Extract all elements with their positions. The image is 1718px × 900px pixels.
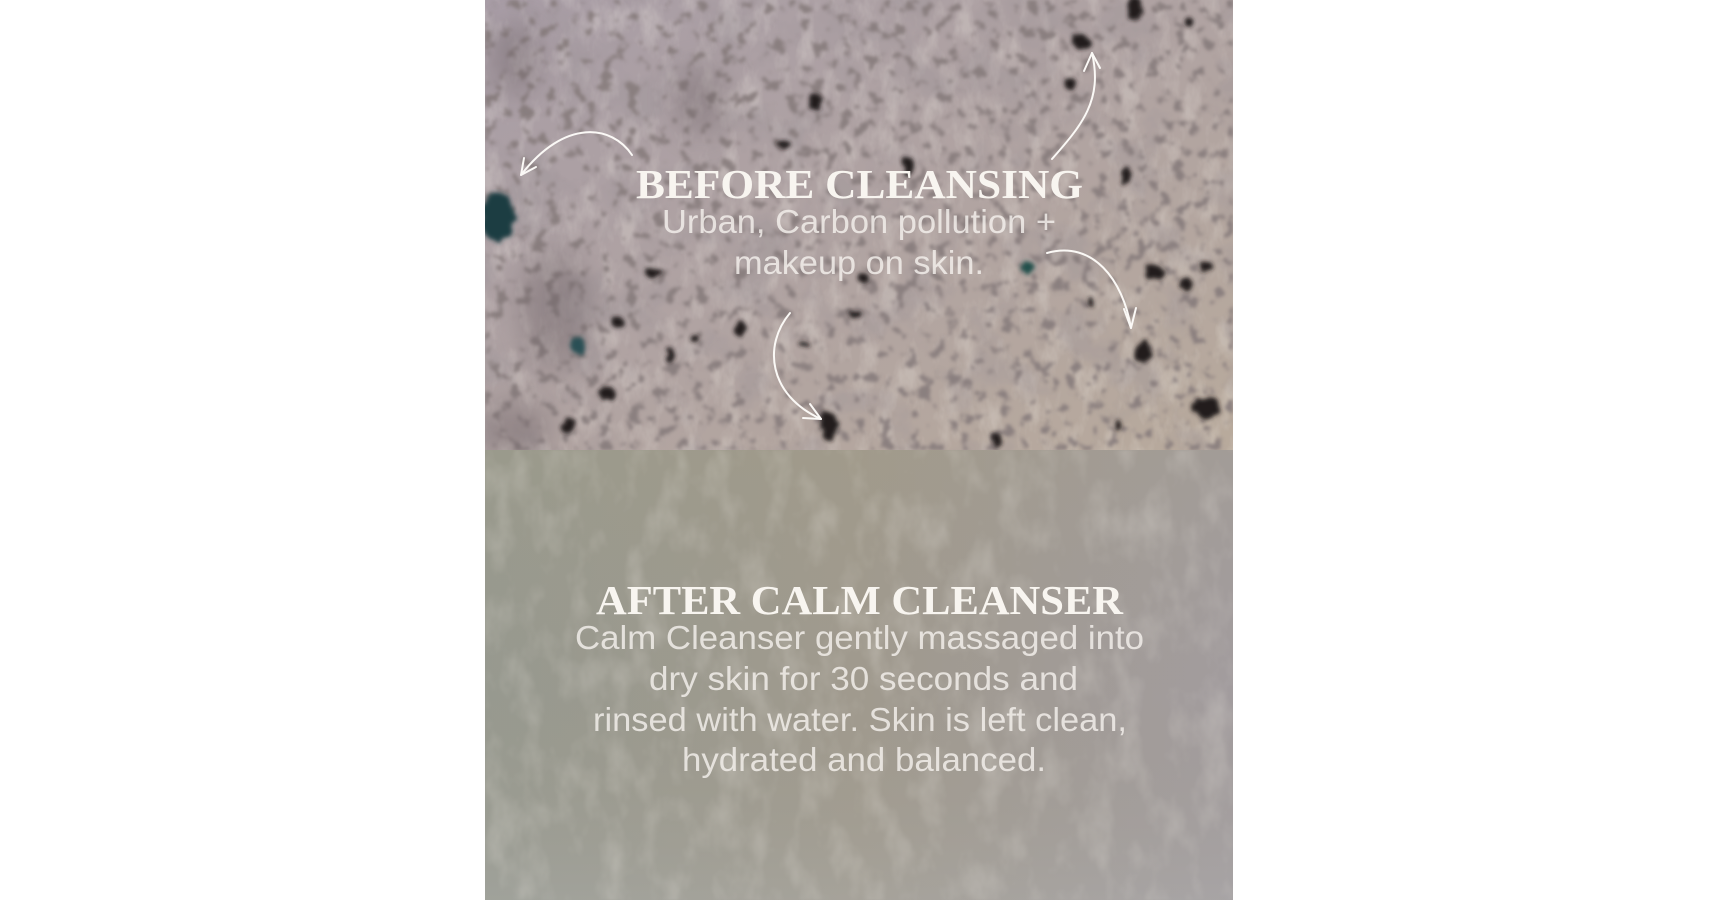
text: before description: Urban, Carbon pollution + xyxy=(662,203,1056,240)
arrow: to upper right speck xyxy=(1052,53,1100,159)
text: after description: hydrated and balanced. xyxy=(682,741,1046,778)
arrow: to lower speck xyxy=(774,313,821,419)
panel: before cleansing xyxy=(480,0,1233,460)
panel: after calm cleanser xyxy=(485,450,1233,900)
text: before description: makeup on skin. xyxy=(734,244,984,281)
arrow: to right speck xyxy=(1047,251,1136,328)
skin photo with pollution specks xyxy=(480,0,1233,460)
text: after description: Calm Cleanser gently massaged into xyxy=(575,619,1144,656)
clean skin photo xyxy=(485,450,1233,900)
infographic: before and after cleansing xyxy=(485,0,1233,900)
text: after description: rinsed with water. Skin is left clean, xyxy=(593,701,1127,738)
text: before description xyxy=(662,203,1056,281)
arrow: to upper left speck xyxy=(521,132,632,175)
heading: after calm cleanser: AFTER CALM CLEANSER xyxy=(596,577,1123,623)
heading: before cleansing: BEFORE CLEANSING xyxy=(636,161,1083,207)
text: after description: dry skin for 30 seconds and xyxy=(649,660,1078,697)
text: after description xyxy=(575,619,1144,778)
